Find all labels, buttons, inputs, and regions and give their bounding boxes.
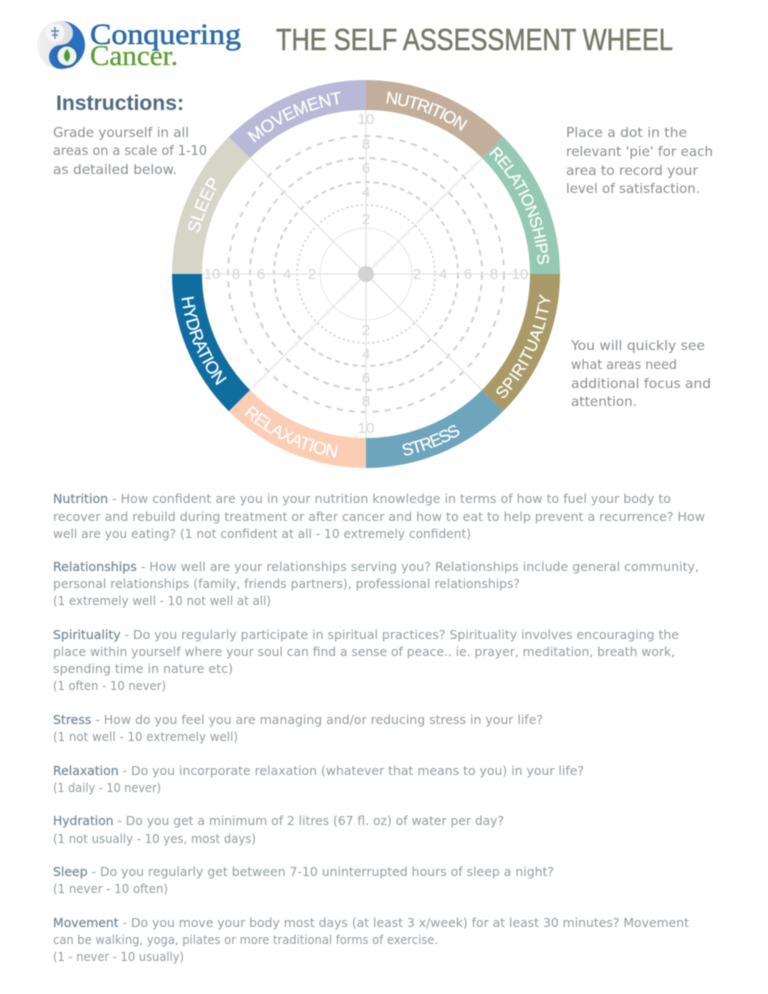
- wheel segment: hydration: HYDRATION: [180, 296, 228, 386]
- text block: place a dot: level of satisfaction.: [566, 182, 700, 197]
- text block: grading instructions: areas on a scale of 1-10: [53, 144, 207, 159]
- text block: relationships description: [53, 560, 699, 608]
- text block: movement description: (1 - never - 10 usually): [53, 950, 184, 964]
- text block: place a dot: area to record your: [566, 164, 698, 179]
- text block: hydration description: (1 not usually - 10 yes, most days): [53, 832, 256, 846]
- wheel segment: nutrition: NUTRITION: [386, 91, 468, 131]
- text block: spirituality description: [53, 628, 679, 693]
- wheel grid rings and spokes: [202, 110, 530, 438]
- wheel segment: stress: STRESS: [402, 424, 460, 456]
- text block: spirituality description: spending time in nature etc): [53, 662, 233, 676]
- text block: place a dot: Place a dot in the: [566, 126, 687, 141]
- scale numbers: 4: [362, 184, 370, 201]
- text block: sleep description: (1 never - 10 often): [53, 882, 168, 896]
- scale numbers: 8: [490, 266, 498, 283]
- text block: nutrition description: Nutrition - How confident are you in your nutrition knowledge in terms of how to fuel your body to: [53, 492, 671, 506]
- scale numbers: 2: [413, 266, 421, 283]
- scale numbers: 6: [257, 266, 265, 283]
- wheel segment: movement: [228, 80, 366, 158]
- text block: quickly see: additional focus and: [571, 377, 711, 392]
- icon: yin yang emblem: [37, 21, 85, 69]
- scale numbers: 8: [362, 136, 370, 153]
- wheel segment: hydration: [171, 273, 250, 412]
- scale numbers: 10: [204, 266, 220, 283]
- text block: place a dot: relevant 'pie' for each: [566, 145, 713, 160]
- logo: [37, 18, 241, 72]
- scale numbers: 6: [464, 266, 472, 283]
- wheel segment: relaxation: RELAXATION: [244, 405, 338, 458]
- text block: movement description: [53, 916, 689, 964]
- scale numbers: [204, 111, 528, 437]
- text block: grading instructions: as detailed below.: [53, 163, 177, 178]
- text block: grading instructions: Grade yourself in all: [53, 126, 189, 141]
- text block: movement description: Movement - Do you move your body most days (at least 3 x/week) for at least 30 minutes? Movement: [53, 916, 689, 930]
- scale numbers: 2: [308, 266, 316, 283]
- text block: quickly see: You will quickly see: [570, 339, 705, 354]
- wheel segment: spirituality: SPIRITUALITY: [496, 294, 551, 399]
- wheel segment: nutrition: [366, 80, 504, 158]
- text block: grading instructions: [53, 126, 207, 178]
- text block: relaxation description: (1 daily - 10 never): [53, 781, 161, 795]
- scale numbers: 4: [439, 266, 447, 283]
- chart: self assessment wheel: [171, 80, 561, 469]
- text block: sleep description: [53, 865, 554, 896]
- text block: hydration description: [53, 814, 504, 846]
- text block: sleep description: Sleep - Do you regularly get between 7-10 uninterrupted hours of sleep a night?: [53, 865, 554, 879]
- scale numbers: 6: [362, 160, 370, 177]
- text block: quickly see: [570, 339, 711, 410]
- text block: quickly see: what areas need: [571, 358, 677, 373]
- scale numbers: 10: [512, 266, 528, 283]
- text block: quickly see: attention.: [571, 395, 637, 410]
- scale numbers: 4: [362, 346, 370, 363]
- wheel segment: relationships: RELATIONSHIPS: [489, 146, 550, 265]
- text block: relaxation description: [53, 764, 584, 795]
- wheel segment: sleep: [172, 136, 250, 274]
- text block: stress description: Stress - How do you feel you are managing and/or reducing stress in your life?: [53, 713, 543, 727]
- scale numbers: 6: [362, 370, 370, 387]
- wheel segment: relaxation: [228, 390, 366, 468]
- scale numbers: 2: [362, 322, 370, 339]
- logo wordmark: Conquering: Conquering: [90, 18, 241, 51]
- wheel segment: movement: MOVEMENT: [247, 91, 341, 143]
- text block: spirituality description: Spirituality - Do you regularly participate in spiritual practices? Spirituality involves encouraging the: [53, 628, 679, 642]
- scale numbers: 8: [232, 266, 240, 283]
- wheel segment: stress: [365, 390, 504, 469]
- text block: place a dot: [566, 126, 713, 197]
- text block: spirituality description: place within yourself where your soul can find a sense of peace.. ie. prayer, meditation, breath work,: [53, 645, 675, 659]
- scale numbers: 10: [358, 111, 374, 128]
- text block: nutrition description: recover and rebuild during treatment or after cancer and how to eat to help prevent a recurrence? How: [53, 510, 705, 524]
- text block: relationships description: Relationships - How well are your relationships serving you? Relationships include general community,: [53, 560, 699, 574]
- text block: relaxation description: Relaxation - Do you incorporate relaxation (whatever that means to you) in your life?: [53, 764, 584, 778]
- text block: movement description: can be walking, yoga, pilates or more traditional forms of exercise.: [53, 933, 438, 947]
- wheel segment: sleep: SLEEP: [188, 177, 216, 233]
- wheel segment: spirituality: [482, 273, 561, 412]
- logo wordmark: Cancer: Cancer.: [90, 41, 178, 72]
- text block: relationships description: (1 extremely well - 10 not well at all): [53, 594, 271, 608]
- text block: relationships description: personal relationships (family, friends partners), professional relationships?: [53, 577, 520, 591]
- scale numbers: 10: [358, 420, 374, 437]
- wheel hub: [358, 266, 374, 282]
- text block: spirituality description: (1 often - 10 never): [53, 679, 166, 693]
- title: THE SELF ASSESSMENT WHEEL: [276, 22, 673, 57]
- text block: stress description: [53, 713, 543, 744]
- text block: nutrition description: [53, 492, 705, 541]
- heading: Instructions: Instructions:: [56, 92, 184, 115]
- scale numbers: 2: [362, 211, 370, 228]
- scale numbers: 4: [283, 266, 291, 283]
- text block: nutrition description: well are you eating? (1 not confident at all - 10 extremely confident): [53, 527, 471, 541]
- scale numbers: 8: [362, 393, 370, 410]
- text block: stress description: (1 not well - 10 extremely well): [53, 730, 238, 744]
- text block: hydration description: Hydration - Do you get a minimum of 2 litres (67 fl. oz) of water per day?: [53, 814, 504, 828]
